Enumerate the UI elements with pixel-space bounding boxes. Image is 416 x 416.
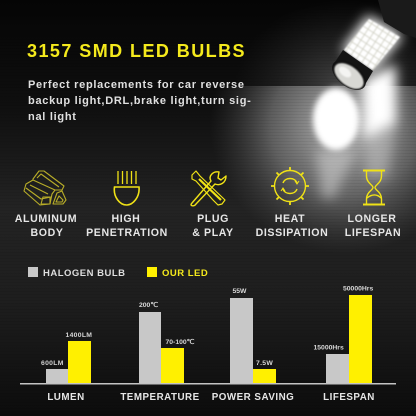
background: [0, 0, 416, 332]
feature: aluminum body: [15, 171, 77, 239]
icon: sun with circular arrows: [271, 167, 309, 205]
description: nal light: [28, 111, 77, 123]
label: & PLAY: [192, 227, 234, 239]
group: lumen: 600LM: [41, 360, 64, 367]
legend: halogen bulb: HALOGEN BULB: [43, 268, 126, 279]
bar chart: [20, 286, 396, 403]
label: PENETRATION: [86, 227, 168, 239]
bulb base: [378, 0, 416, 38]
group: power saving: 55W: [232, 288, 247, 295]
group: power saving: [212, 288, 294, 403]
group: temperature: [120, 301, 200, 403]
group: temperature: 200℃: [139, 301, 158, 309]
bulb LED body: [342, 15, 403, 73]
label: HEAT: [275, 213, 305, 225]
icon: headlight beam: [114, 171, 139, 205]
group: power saving: POWER SAVING: [212, 392, 294, 403]
bulb collar and lens: [327, 50, 373, 96]
label: ALUMINUM: [15, 213, 77, 225]
label: DISSIPATION: [256, 227, 328, 239]
group: lumen: [41, 332, 92, 403]
group: lifespan: [314, 286, 375, 403]
icon: aluminum ingots: [24, 171, 66, 205]
feature: heat dissipation: [256, 167, 328, 239]
chart axis: [20, 383, 396, 384]
label: [15, 213, 77, 239]
group: lifespan: LIFESPAN: [323, 392, 375, 403]
description: Perfect replacements for car reverse: [28, 79, 245, 91]
icon: wrench and screwdriver: [191, 171, 226, 206]
label: [192, 213, 234, 239]
description: backup light,DRL,brake light,turn sig-: [28, 95, 252, 107]
label: BODY: [30, 227, 64, 239]
feature: longer lifespan: [345, 170, 401, 239]
title: 3157 SMD LED BULBS: [27, 41, 246, 61]
label: [86, 213, 168, 239]
group: temperature: 70-100℃: [166, 338, 195, 346]
legend: our led: [147, 267, 208, 279]
label: LONGER: [348, 213, 396, 225]
label: PLUG: [197, 213, 229, 225]
feature: high penetration: [86, 171, 168, 239]
group: lifespan: 50000Hrs: [343, 286, 373, 292]
group: lumen: 1400LM: [66, 332, 92, 339]
label: [256, 213, 328, 239]
light reflection on the ground: [313, 64, 396, 198]
bulb photo: [313, 0, 416, 198]
group: lifespan: 15000Hrs: [314, 344, 344, 352]
group: lumen: LUMEN: [47, 392, 85, 403]
legend: [28, 267, 208, 279]
label: [345, 213, 401, 239]
description: [28, 79, 252, 123]
feature: plug and play: [191, 171, 234, 239]
group: temperature: TEMPERATURE: [120, 392, 200, 403]
legend: our led: OUR LED: [162, 268, 208, 279]
icon: hourglass: [363, 170, 385, 204]
group: power saving: 7.5W: [256, 360, 273, 367]
label: HIGH: [112, 213, 140, 225]
label: LIFESPAN: [345, 227, 401, 239]
